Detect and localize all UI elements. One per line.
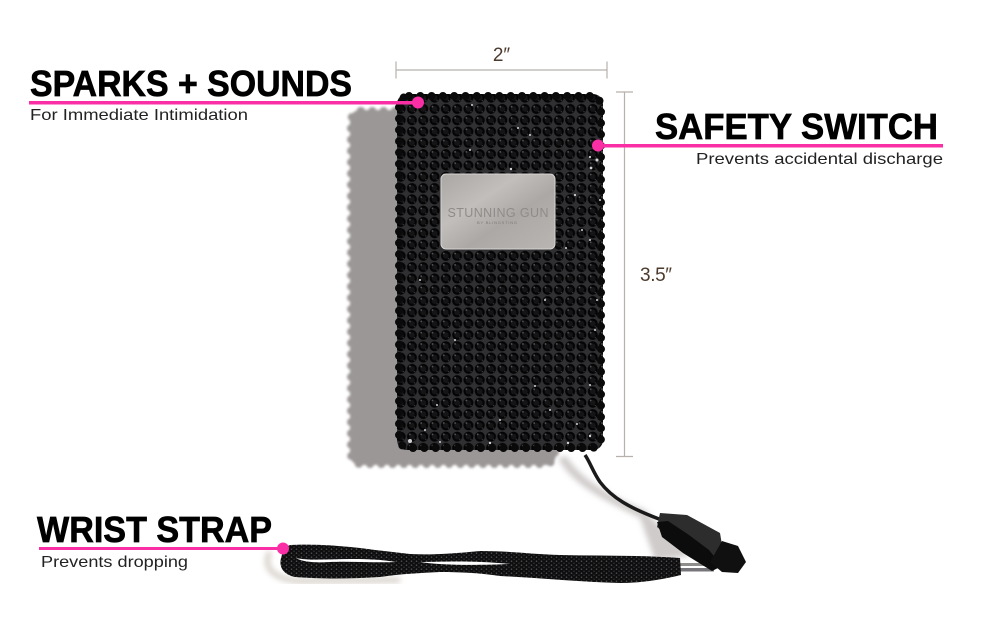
width label: 2″ [493, 45, 510, 66]
brand subline: BY BLINGSTING [477, 220, 517, 225]
height dimension [616, 92, 672, 456]
device shadow [350, 110, 556, 465]
height label: 3.5″ [640, 265, 672, 286]
sparkles [408, 104, 601, 444]
leader dot [592, 140, 604, 152]
case body [397, 94, 603, 450]
clip lower [657, 521, 722, 571]
description: Prevents accidental discharge [696, 151, 943, 168]
plastic clip [657, 513, 746, 573]
description: For Immediate Intimidation [30, 107, 248, 124]
strap knot [710, 541, 746, 573]
scalloped edge [399, 96, 601, 448]
brand name: STUNNING GUN [448, 206, 548, 220]
metal nameplate [441, 174, 555, 249]
callout: wrist strap [37, 509, 289, 571]
leader dot [277, 542, 289, 554]
wrist strap [280, 455, 746, 583]
strap shadow [268, 552, 400, 581]
heading: SPARKS + SOUNDS [30, 63, 352, 104]
heading: WRIST STRAP [37, 509, 272, 550]
leader dot [412, 96, 424, 108]
cord shadow [558, 456, 690, 560]
connecting cord [585, 455, 659, 519]
clip upper [657, 513, 722, 562]
leader line [39, 547, 283, 550]
width dimension [396, 45, 607, 78]
callout: sparks and sounds [29, 63, 424, 124]
leader line [29, 101, 418, 104]
rhinestone device [397, 94, 603, 450]
description: Prevents dropping [41, 554, 188, 571]
heading: SAFETY SWITCH [655, 106, 938, 147]
ring upper bar [678, 563, 714, 566]
leader line [597, 144, 943, 148]
metal ring [678, 563, 714, 572]
callout: safety switch [592, 106, 943, 168]
ring lower bar [678, 568, 714, 572]
strap loop [280, 545, 681, 583]
